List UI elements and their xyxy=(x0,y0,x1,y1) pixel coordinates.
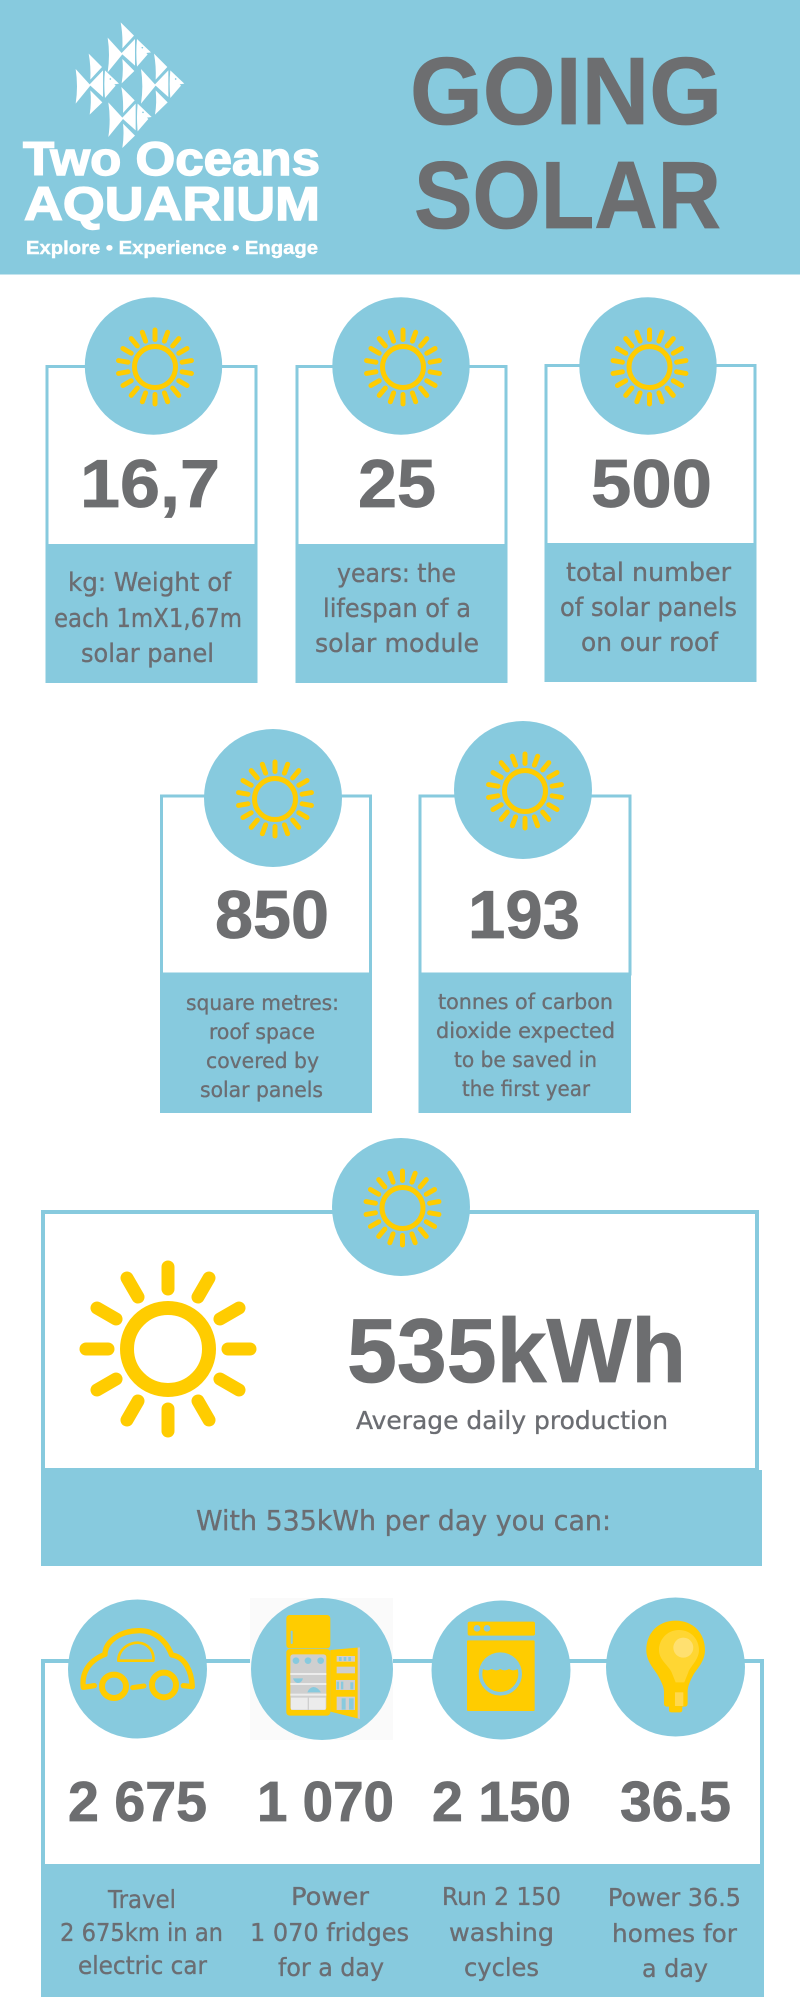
icon: fridge xyxy=(286,1615,360,1719)
description xyxy=(560,558,737,658)
description: solar panel xyxy=(81,639,214,669)
icon: light bulb xyxy=(646,1621,705,1712)
description: Travel xyxy=(107,1885,176,1914)
panel: 500 solar panels xyxy=(544,297,756,682)
logo wordmark: Two Oceans xyxy=(23,132,320,185)
description: 1 070 fridges xyxy=(250,1918,409,1947)
title: Going Solar xyxy=(410,38,722,249)
description: of solar panels xyxy=(560,593,737,623)
logo wordmark: AQUARIUM xyxy=(24,177,320,230)
description: roof space xyxy=(209,1020,315,1044)
description: years: the xyxy=(337,559,456,589)
description xyxy=(436,990,615,1101)
icon: sun xyxy=(366,1171,439,1245)
number: 1 070 xyxy=(257,1770,394,1834)
number: 2 150 xyxy=(432,1770,571,1834)
description: square metres: xyxy=(186,991,339,1015)
description: washing xyxy=(449,1918,554,1947)
description: electric car xyxy=(78,1951,208,1980)
light bulb column xyxy=(606,1598,745,1983)
description: homes for xyxy=(612,1919,738,1948)
panel: 25 years xyxy=(296,297,508,683)
logo wordmark: Explore • Experience • Engage xyxy=(26,238,318,258)
caption: Average daily production xyxy=(356,1406,668,1435)
title: Going Solar: SOLAR xyxy=(414,142,721,249)
fridge column xyxy=(250,1598,409,1982)
icon: school of fish diamond xyxy=(76,22,184,148)
car column xyxy=(60,1600,223,1980)
description xyxy=(186,991,339,1102)
number: 850 xyxy=(215,877,329,953)
icon: car xyxy=(83,1631,192,1698)
icon: sun xyxy=(119,330,191,404)
title: Going Solar: GOING xyxy=(410,38,722,145)
icon: sun xyxy=(367,330,439,404)
description: for a day xyxy=(278,1953,384,1982)
description: solar module xyxy=(315,629,479,659)
panel: 193 tonnes of carbon dioxide xyxy=(418,721,631,1113)
description: to be saved in xyxy=(454,1048,597,1072)
description: Power 36.5 xyxy=(608,1883,741,1912)
panel: 16,7 kg xyxy=(46,297,258,683)
description: cycles xyxy=(464,1953,539,1982)
header band xyxy=(0,0,800,274)
number: 25 xyxy=(358,446,436,522)
logo wordmark xyxy=(23,132,320,258)
description: covered by xyxy=(206,1049,319,1073)
number: 16,7 xyxy=(80,446,220,522)
description xyxy=(442,1882,561,1982)
description xyxy=(54,568,242,669)
icon: large sun xyxy=(86,1267,250,1431)
description: a day xyxy=(642,1954,708,1983)
description: the first year xyxy=(462,1077,590,1101)
description xyxy=(250,1882,409,1982)
banner: with 535kWh per day xyxy=(41,1470,762,1566)
description: each 1mX1,67m xyxy=(54,604,242,634)
number: 2 675 xyxy=(68,1770,207,1834)
description: on our roof xyxy=(581,628,719,658)
description: Run 2 150 xyxy=(442,1882,561,1911)
description: 2 675km in an xyxy=(60,1918,223,1947)
banner: with 535kWh per day: With 535kWh per day you can: xyxy=(196,1504,611,1537)
icon: sun xyxy=(613,330,686,404)
number: 193 xyxy=(468,877,580,953)
description: kg: Weight of xyxy=(68,568,232,598)
panel: 535kWh average daily production xyxy=(41,1138,762,1566)
icon: sun xyxy=(239,762,311,836)
description xyxy=(60,1885,223,1980)
description xyxy=(315,559,479,659)
description: lifespan of a xyxy=(323,594,471,624)
description: tonnes of carbon xyxy=(438,990,613,1014)
description: solar panels xyxy=(200,1078,323,1102)
description: Power xyxy=(291,1882,370,1911)
panel: 850 square metres xyxy=(160,729,372,1113)
washing machine column xyxy=(432,1600,571,1982)
description: total number xyxy=(566,558,731,588)
panel: what 535kWh can do xyxy=(41,1598,764,1997)
number: 36.5 xyxy=(620,1770,731,1834)
icon: washing machine xyxy=(467,1622,535,1711)
number: 535kWh xyxy=(347,1301,686,1402)
icon: sun xyxy=(489,754,561,828)
number: 500 xyxy=(591,446,712,522)
description: dioxide expected xyxy=(436,1019,615,1043)
logo: Two Oceans Aquarium xyxy=(23,22,320,258)
description xyxy=(608,1883,741,1983)
